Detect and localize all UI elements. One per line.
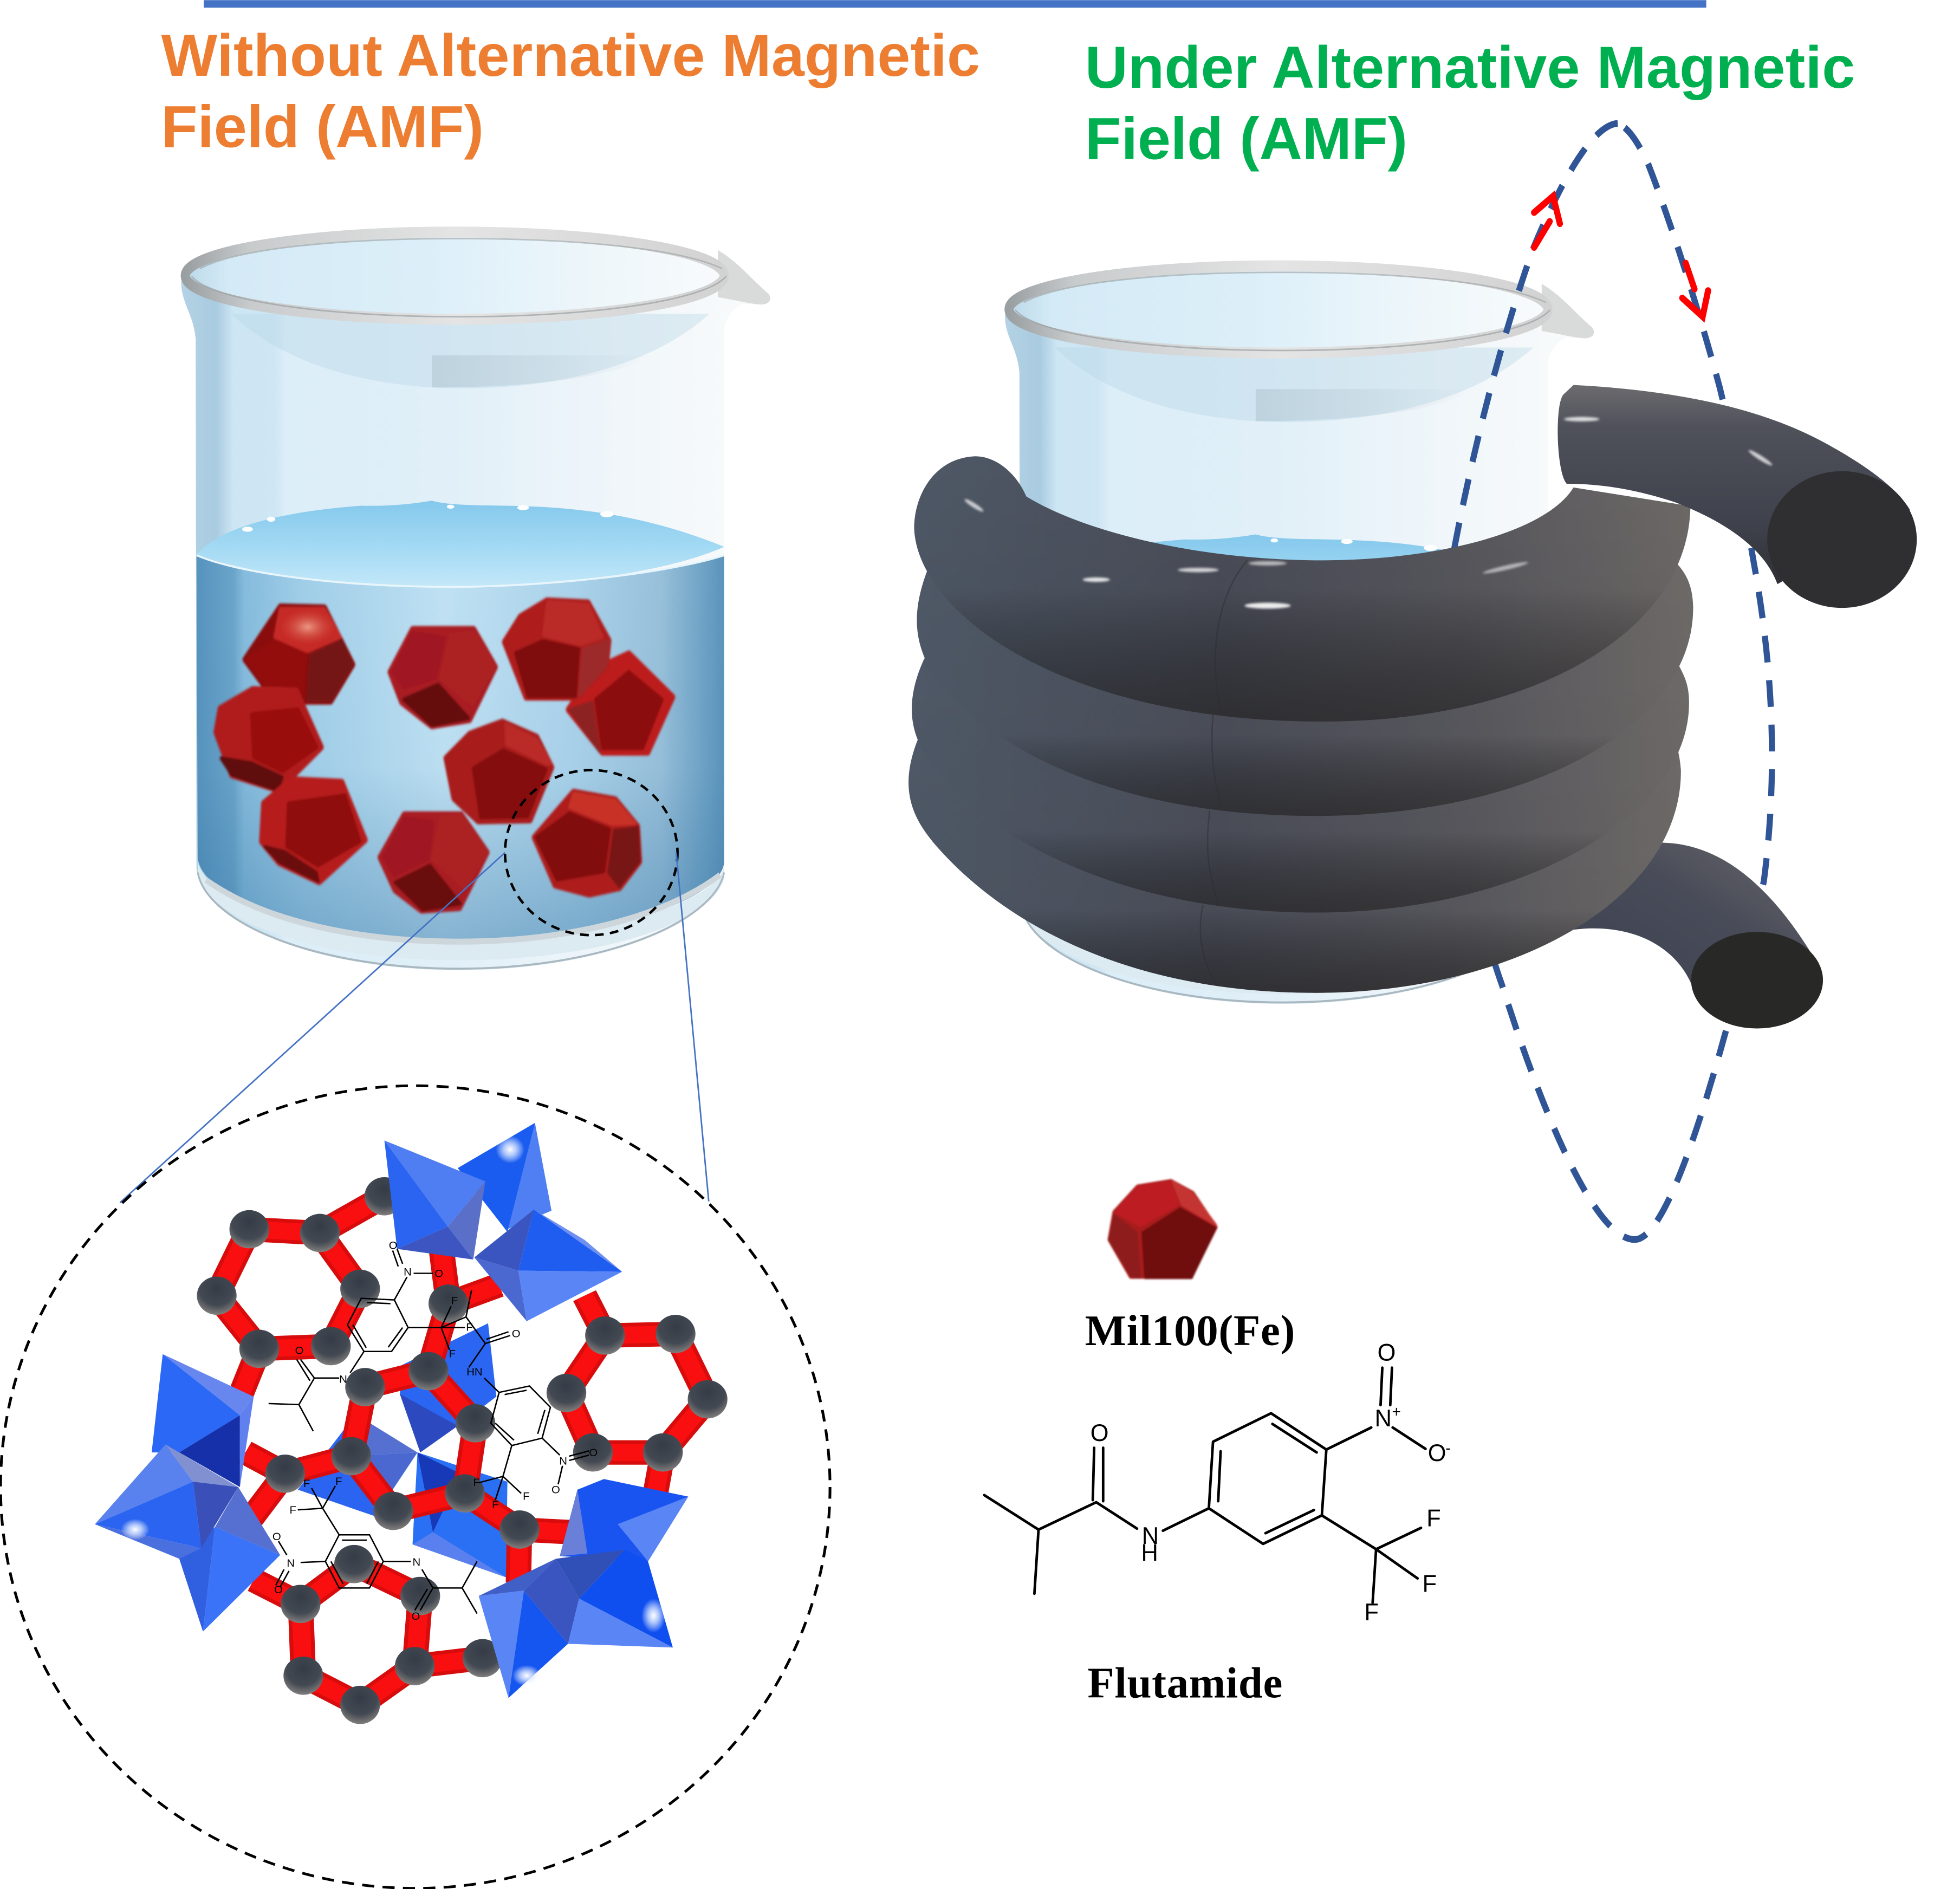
flutamide molecule overlay 1: F [449, 1348, 456, 1360]
blue polyhedra right group [479, 1479, 688, 1698]
beaker glass and water [181, 232, 770, 970]
atom labels: N [1142, 1522, 1159, 1549]
left beaker with particles [181, 232, 770, 970]
atom labels: F [1423, 1570, 1437, 1598]
particle 1 [245, 607, 352, 701]
atom labels: H [1141, 1539, 1158, 1566]
atom labels: O [1091, 1419, 1108, 1446]
coil turn 1 [914, 456, 1690, 722]
flutamide molecule overlay 2: O [589, 1447, 598, 1459]
flutamide molecule overlay 3: F [289, 1504, 296, 1516]
flutamide molecule overlay 1: N [339, 1374, 347, 1386]
flutamide molecule overlay 2: HN [466, 1366, 483, 1378]
flutamide molecule overlay 2: F [473, 1477, 480, 1489]
flutamide molecule overlay 3: F [335, 1476, 342, 1488]
particle 8 [380, 815, 486, 910]
atom labels: N [1375, 1405, 1392, 1432]
flutamide molecule overlay 2: N [559, 1456, 567, 1468]
particle 7 [262, 780, 365, 881]
heading: without AMF: Without Alternative Magnetic [161, 23, 980, 89]
flutamide molecule overlay 2 [441, 1290, 598, 1511]
glossy highlights [964, 417, 1773, 608]
flutamide molecule overlay 1: O [295, 1345, 303, 1357]
blue polyhedra left group [95, 1354, 280, 1632]
top rule [204, 0, 1706, 8]
flutamide molecule overlay 1: O [434, 1268, 443, 1280]
atom labels: + [1392, 1403, 1401, 1420]
flutamide molecule overlay 2: O [551, 1484, 560, 1496]
particle 9 [535, 793, 639, 894]
flutamide molecule overlay 1: O [389, 1240, 398, 1251]
particle 5 [216, 690, 321, 790]
coil seams [1200, 560, 1247, 985]
induction coil and magnetic field loop [908, 124, 1917, 1239]
flutamide molecule overlay 2: F [523, 1491, 530, 1502]
flutamide molecule overlay 3: O [411, 1611, 420, 1622]
heading: under AMF: Under Alternative Magnetic [1085, 35, 1855, 101]
right beaker [1005, 266, 1594, 1004]
flutamide molecule overlay 3 [272, 1476, 477, 1622]
red field direction arrows [1534, 196, 1708, 316]
legend: Mil100(Fe) particle [1109, 1182, 1216, 1278]
heading: under AMF: Field (AMF) [1085, 106, 1407, 172]
particle 4 [569, 654, 672, 752]
dashed magnifier circle [1, 1086, 830, 1888]
particle 6 [446, 722, 551, 821]
blue polyhedra top group [385, 1123, 622, 1321]
upper coil lead [1557, 385, 1917, 608]
lower coil lead [1574, 842, 1823, 1029]
heading: without AMF: Field (AMF) [161, 94, 484, 160]
bonds [984, 1368, 1425, 1602]
atom labels: F [1364, 1599, 1379, 1626]
flutamide molecule overlay 1: N [404, 1267, 412, 1278]
flutamide molecule overlay 3: N [412, 1556, 420, 1568]
flutamide structure [984, 1339, 1451, 1626]
atom labels: O [1428, 1439, 1446, 1466]
particle 3 [505, 601, 608, 697]
atom labels [1091, 1339, 1451, 1626]
flutamide molecule overlay 2: O [512, 1328, 521, 1340]
flutamide molecule overlay 1: F [466, 1322, 473, 1333]
label: Flutamide: Flutamide [1087, 1659, 1282, 1708]
atom labels: O [1378, 1339, 1396, 1366]
dashed magnetic field loop [1449, 124, 1772, 1239]
atom labels: F [1426, 1505, 1441, 1532]
atom labels: - [1445, 1439, 1451, 1457]
central blue polyhedra [298, 1323, 508, 1578]
flutamide molecule overlay 3: N [287, 1557, 295, 1569]
flutamide molecule overlay 3: O [272, 1531, 281, 1543]
label: Mil100(Fe): Mil100(Fe) [1085, 1307, 1295, 1355]
carbon nodes [197, 1177, 728, 1724]
flutamide molecule overlay 2: F [492, 1499, 499, 1511]
flutamide molecule overlay 1 [269, 1240, 473, 1431]
coil turn 4 [908, 733, 1681, 993]
MOF structure zoom view [1, 1086, 830, 1888]
flutamide molecule overlay 1: F [451, 1295, 458, 1307]
magnified region marker circle [505, 770, 678, 935]
coil turn 2 [917, 562, 1693, 816]
red bonds [217, 1196, 708, 1705]
flutamide molecule overlay 3: F [303, 1478, 310, 1490]
particle 2 [391, 629, 495, 726]
particles in water [216, 601, 672, 910]
zoom connector lines [120, 853, 709, 1203]
coil turn 3 [912, 658, 1689, 913]
flutamide molecule overlay 3: O [274, 1584, 283, 1596]
